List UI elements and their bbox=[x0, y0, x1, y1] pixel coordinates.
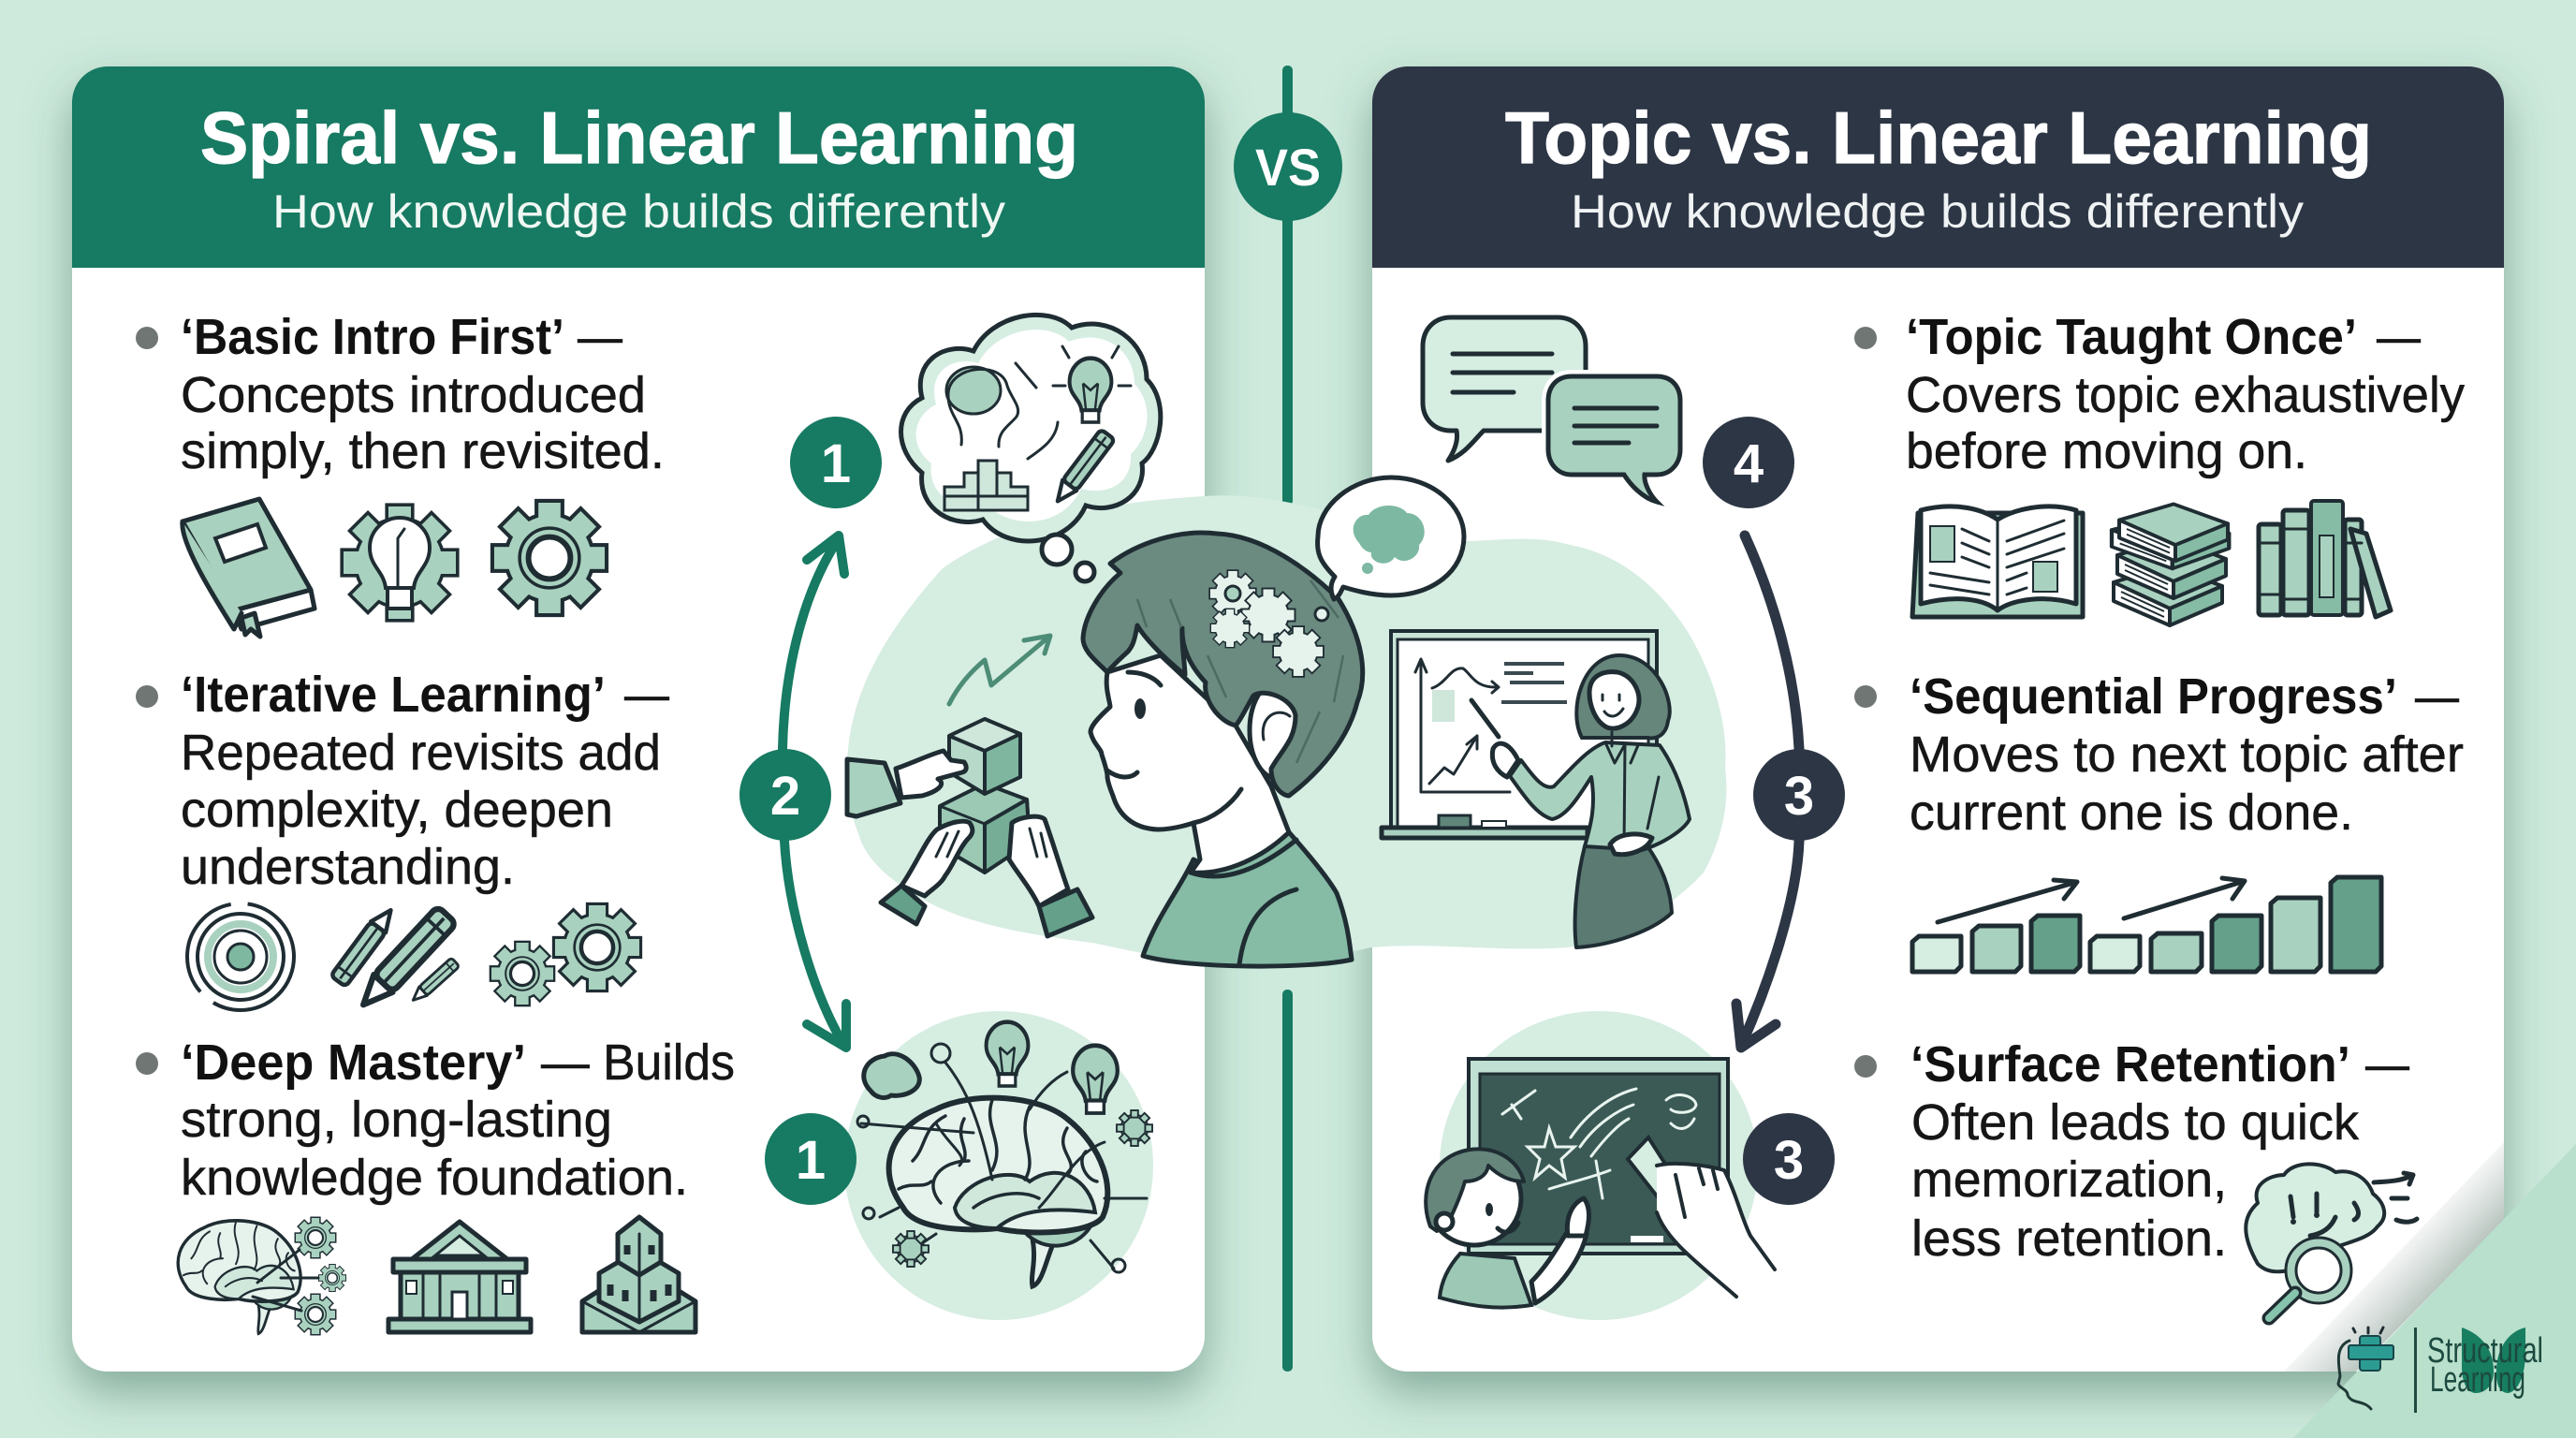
icon: pencils bbox=[330, 904, 460, 1014]
lower right hand bbox=[1009, 816, 1068, 906]
hair back bbox=[1576, 655, 1670, 738]
icon: lightbulb gear bbox=[344, 506, 456, 619]
bullet: deep mastery: knowledge foundation. bbox=[181, 1150, 688, 1206]
hand with eraser bbox=[1657, 1164, 1775, 1297]
arrow: dark lower bbox=[1736, 841, 1799, 1048]
bullet: sequential progress bbox=[1854, 668, 2464, 841]
icon: book bbox=[183, 499, 315, 637]
boy bbox=[1083, 533, 1363, 966]
bullet: topic taught once bbox=[1854, 309, 2465, 479]
number badge: 3 upper: 3 bbox=[1784, 766, 1814, 827]
bullet: deep mastery: ‘Deep Mastery’ bbox=[181, 1034, 526, 1091]
logo divider bbox=[2414, 1328, 2417, 1413]
central illustration backdrop bbox=[847, 495, 1726, 963]
bullet: basic intro first bbox=[136, 309, 665, 479]
bullet: deep mastery: — Builds bbox=[541, 1034, 735, 1091]
bullet: deep mastery: strong, long-lasting bbox=[181, 1092, 612, 1148]
left sleeve bbox=[847, 759, 900, 816]
title: spiral: Spiral vs. Linear Learning bbox=[200, 96, 1078, 179]
bullet: basic intro first: ‘Basic Intro First’ bbox=[181, 309, 564, 365]
title: topic: Topic vs. Linear Learning bbox=[1505, 96, 2372, 179]
bullet: basic intro first: — bbox=[578, 309, 622, 365]
shirt bbox=[1143, 832, 1352, 966]
arrow: dark upper bbox=[1745, 536, 1799, 749]
subtitle: spiral: How knowledge builds differently bbox=[272, 185, 1005, 238]
upper left hand bbox=[896, 751, 966, 798]
chart on board bbox=[1415, 659, 1510, 792]
bullet: basic intro first: Concepts introduced bbox=[181, 367, 646, 423]
panel: spiral vs linear bbox=[72, 66, 1205, 1372]
icon: gear bbox=[494, 503, 605, 613]
number badge: 1 bottom left bbox=[765, 1113, 856, 1205]
facial features bbox=[1134, 698, 1146, 719]
bullet: sequential progress: current one is done. bbox=[1910, 785, 2353, 841]
skirt bbox=[1575, 846, 1672, 947]
icon: stacked building bbox=[582, 1217, 695, 1332]
arrow: green up bbox=[783, 536, 844, 749]
head bbox=[1589, 672, 1639, 728]
logo: Structural Learning: Learning bbox=[2430, 1360, 2525, 1400]
lower left hand bbox=[901, 821, 973, 896]
body and arms bbox=[1510, 742, 1690, 850]
number badge: 4 bbox=[1703, 417, 1794, 508]
icon: spiral target bbox=[187, 903, 294, 1010]
gears in hair bbox=[1210, 571, 1255, 616]
arrow: green down bbox=[784, 841, 846, 1048]
ear bbox=[1250, 682, 1306, 779]
panel: topic vs linear bbox=[1372, 66, 2504, 1372]
bullet: surface retention: less retention. bbox=[1911, 1211, 2227, 1267]
header band: spiral bbox=[72, 66, 1205, 268]
thought circles bbox=[1042, 535, 1094, 581]
VS badge: VS bbox=[1255, 138, 1321, 197]
number badge: 3 lower: 3 bbox=[1774, 1130, 1804, 1191]
bullet: deep mastery bbox=[136, 1034, 735, 1206]
teacher at whiteboard bbox=[1382, 631, 1690, 947]
logo wordmark: Structural bbox=[2427, 1331, 2543, 1371]
bullet: surface retention: Often leads to quick bbox=[1911, 1094, 2360, 1151]
bullet: surface retention: — bbox=[2365, 1036, 2409, 1093]
bullet: sequential progress: — bbox=[2415, 668, 2459, 725]
hair bbox=[1083, 533, 1363, 796]
number badge: 3 lower bbox=[1743, 1113, 1835, 1205]
thought cloud: learning ideas bbox=[900, 315, 1161, 541]
bulbs bbox=[987, 1022, 1028, 1086]
upper cube bbox=[949, 719, 1020, 794]
logo: Structural Learning bbox=[2338, 1328, 2543, 1413]
logo leaves bbox=[2462, 1328, 2494, 1393]
chalk marks bbox=[1502, 1089, 1696, 1198]
icon: fading memory under magnifier bbox=[2246, 1164, 2417, 1318]
number badge: 1 bottom left: 1 bbox=[796, 1130, 826, 1191]
icon: stacked books bbox=[2112, 504, 2229, 625]
icon: two gears bbox=[491, 905, 639, 1005]
bullet: topic taught once: Covers topic exhaustively bbox=[1906, 367, 2465, 423]
bullet: iterative learning bbox=[136, 667, 669, 895]
number badge: 4: 4 bbox=[1734, 433, 1764, 494]
speech bubbles bbox=[1423, 317, 1680, 502]
gears bbox=[1117, 1110, 1152, 1146]
hands building blocks bbox=[847, 636, 1092, 936]
number badge: 1 top left bbox=[790, 417, 882, 508]
face and neck bbox=[1090, 655, 1289, 873]
brain backdrop bbox=[844, 1011, 1153, 1320]
logo head bbox=[2338, 1341, 2371, 1409]
connector lines bbox=[861, 1063, 1147, 1269]
bullet: sequential progress: ‘Sequential Progress’ bbox=[1910, 668, 2397, 725]
icon: rising bars bbox=[1912, 877, 2381, 972]
icon: open book bbox=[1912, 506, 2083, 617]
lower cube bbox=[940, 784, 1030, 873]
kid bbox=[1440, 1254, 1531, 1308]
bullet: topic taught once: before moving on. bbox=[1906, 423, 2307, 479]
bullet: topic taught once: ‘Topic Taught Once’ bbox=[1906, 309, 2357, 365]
number badge: 1 top left: 1 bbox=[821, 433, 851, 494]
bullet: iterative learning: ‘Iterative Learning’ bbox=[181, 667, 606, 723]
chalkboard scene bbox=[1426, 1059, 1775, 1308]
hands bbox=[1492, 743, 1652, 855]
bullet: iterative learning: Repeated revisits add bbox=[181, 725, 661, 781]
icon: upright books bbox=[2259, 501, 2391, 617]
cloud bbox=[864, 1054, 919, 1097]
bullet: iterative learning: — bbox=[624, 667, 669, 723]
number badge: 2: 2 bbox=[770, 766, 800, 827]
big brain with ideas bbox=[844, 1011, 1153, 1320]
chalkboard scene backdrop bbox=[1440, 1011, 1758, 1320]
centre divider line bbox=[1282, 66, 1293, 1372]
bullet: iterative learning: complexity, deepen bbox=[181, 782, 613, 838]
subtitle: topic: How knowledge builds differently bbox=[1571, 185, 2304, 238]
header band: topic bbox=[1372, 66, 2504, 268]
bullet: surface retention: memorization, bbox=[1911, 1152, 2227, 1208]
VS badge bbox=[1234, 112, 1342, 221]
bullet: surface retention: ‘Surface Retention’ bbox=[1910, 1036, 2350, 1093]
shirt collar bbox=[1191, 840, 1296, 964]
bullet: topic taught once: — bbox=[2377, 309, 2421, 365]
bullet: iterative learning: understanding. bbox=[181, 839, 515, 895]
number badge: 2 bbox=[739, 749, 831, 841]
icon: brain with gears bbox=[178, 1218, 345, 1334]
icon: temple bbox=[388, 1222, 531, 1332]
number badge: 3 upper bbox=[1753, 749, 1845, 841]
bullet: sequential progress: Moves to next topic after bbox=[1910, 726, 2464, 783]
speech bubble with cloud bbox=[1318, 477, 1464, 599]
bullet: surface retention bbox=[1854, 1036, 2409, 1267]
chalkboard bbox=[1469, 1059, 1728, 1254]
rising arrow bbox=[949, 636, 1050, 704]
bullet: basic intro first: simply, then revisited. bbox=[181, 423, 665, 479]
whiteboard bbox=[1391, 631, 1657, 835]
folded page corner bbox=[2284, 1142, 2576, 1438]
eraser bbox=[1628, 1137, 1696, 1228]
logo cross bbox=[2360, 1336, 2380, 1371]
